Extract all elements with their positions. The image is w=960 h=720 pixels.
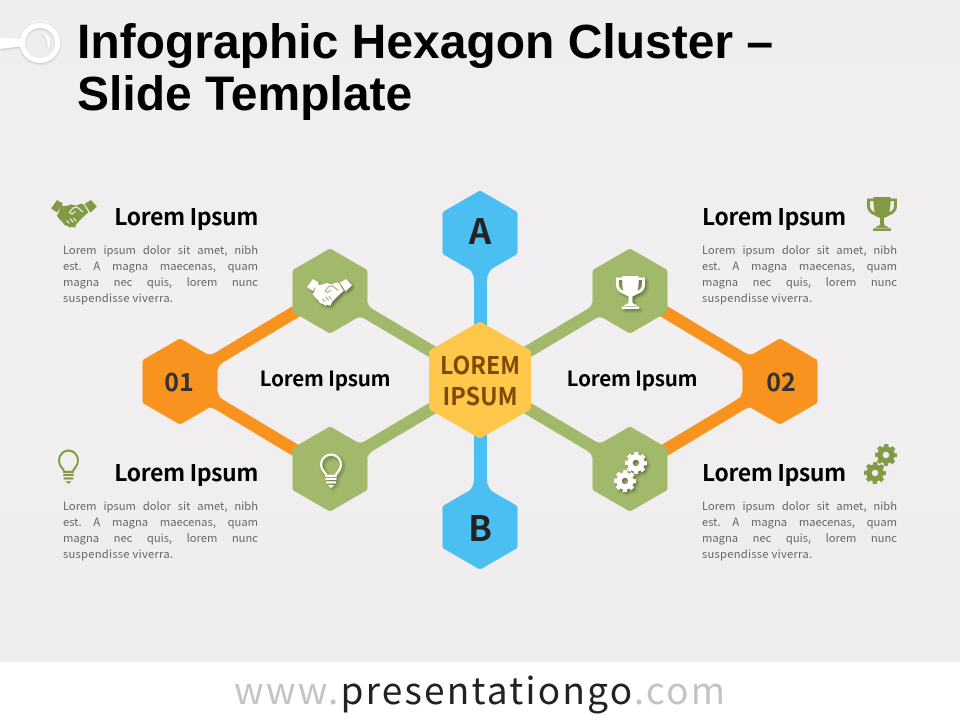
hexagon A: A: [468, 204, 492, 255]
icon: trophy olive: [867, 197, 897, 231]
icon: handshake olive: [51, 200, 97, 228]
footer url: www.presentationgo.com: [234, 661, 725, 715]
hexagon: center: [433, 326, 527, 434]
center label: left: Lorem Ipsum: [260, 362, 390, 392]
text block: bottom right: suspendisse viverra.: [702, 546, 812, 562]
text block: bottom right: [702, 498, 897, 562]
hexagon: gears: [596, 431, 664, 507]
text block: top left: est. A magna maecenas, quam: [63, 258, 258, 274]
hexagon: trophy: [596, 253, 664, 329]
hexagon B: [446, 489, 514, 565]
hexagon A: [446, 195, 514, 271]
title: [77, 16, 773, 121]
hexagon 01: 01: [164, 363, 194, 399]
hexagon 01: [146, 343, 214, 420]
hexagon: handshake: [296, 253, 364, 329]
text block: bottom right: Lorem ipsum dolor sit amet, nibh: [702, 498, 897, 514]
icon: gears olive: [866, 446, 895, 482]
heading: bottom left: Lorem Ipsum: [114, 455, 258, 488]
heading: top right: Lorem Ipsum: [702, 199, 846, 232]
text block: bottom right: est. A magna maecenas, quam: [702, 514, 897, 530]
header pin decoration: [0, 26, 58, 60]
center label: right: Lorem Ipsum: [567, 362, 697, 392]
connector: blue links: [468, 260, 492, 500]
hexagon B: B: [468, 501, 492, 552]
hexagon 02: 02: [766, 363, 796, 399]
text block: top left: magna nec quis, lorem nunc: [63, 274, 258, 290]
text block: top left: Lorem ipsum dolor sit amet, nibh: [63, 242, 258, 258]
text block: bottom left: Lorem ipsum dolor sit amet, nibh: [63, 498, 258, 514]
text block: bottom left: magna nec quis, lorem nunc: [63, 530, 258, 546]
text block: top left: suspendisse viverra.: [63, 290, 173, 306]
text block: bottom left: [63, 498, 258, 562]
hexagon 02: [746, 343, 814, 420]
text block: top right: est. A magna maecenas, quam: [702, 258, 897, 274]
text block: bottom right: magna nec quis, lorem nunc: [702, 530, 897, 546]
text block: bottom left: est. A magna maecenas, quam: [63, 514, 258, 530]
hexagon: light bulb: [296, 431, 364, 507]
text block: top right: suspendisse viverra.: [702, 290, 812, 306]
heading: bottom right: Lorem Ipsum: [702, 455, 846, 488]
title: Slide Template: [77, 68, 412, 121]
connector: orange links: [180, 291, 780, 471]
hexagon: center: IPSUM: [442, 377, 518, 412]
text block: bottom left: suspendisse viverra.: [63, 546, 173, 562]
hexagon: center: LOREM: [440, 346, 520, 381]
text block: top right: magna nec quis, lorem nunc: [702, 274, 897, 290]
connector: green links: [330, 291, 630, 469]
text block: top right: [702, 242, 897, 306]
title: Infographic Hexagon Cluster –: [77, 16, 773, 69]
footer band: [0, 662, 960, 720]
text block: top left: [63, 242, 258, 306]
icon: bulb olive: [59, 451, 78, 484]
text block: top right: Lorem ipsum dolor sit amet, nibh: [702, 242, 897, 258]
heading: top left: Lorem Ipsum: [114, 199, 258, 232]
